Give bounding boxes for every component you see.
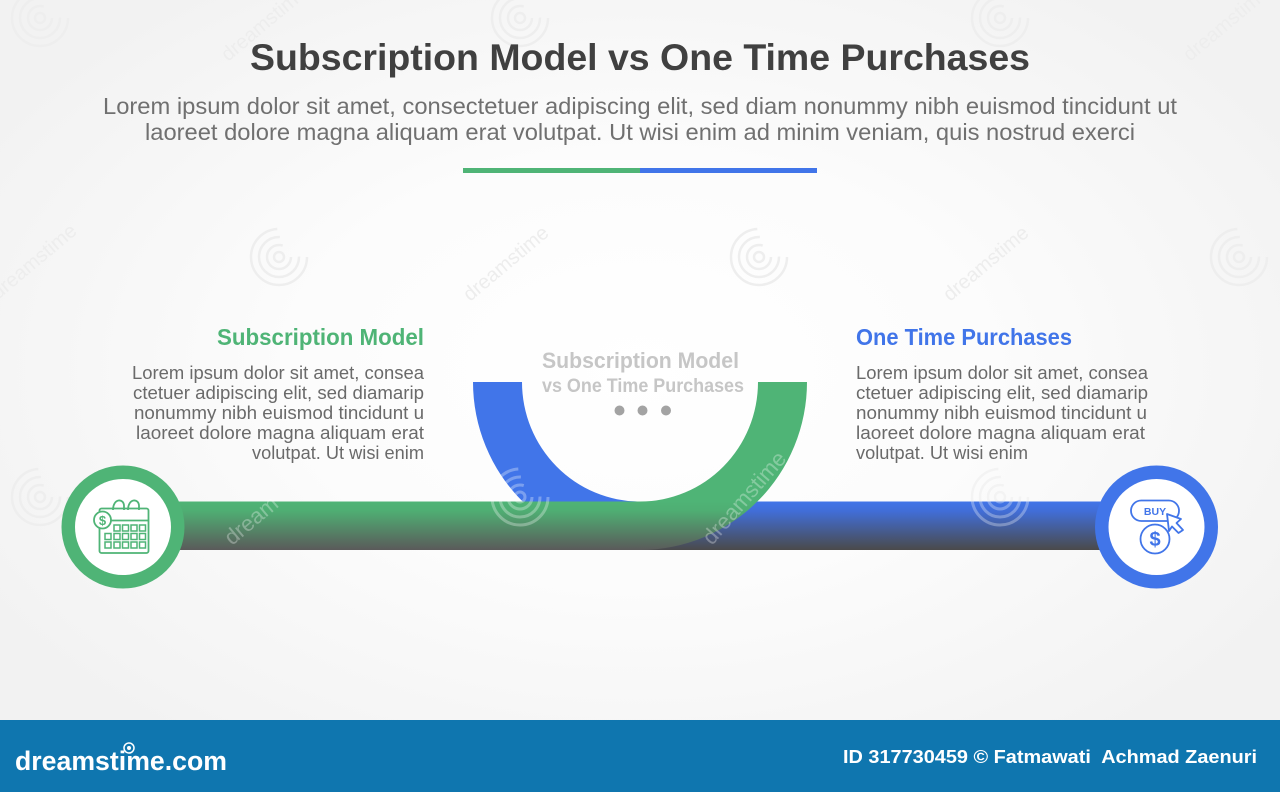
icon badge: calendar subscription — [62, 466, 184, 588]
icon: buy button, cursor and coin: $ — [1149, 529, 1161, 551]
body text left: laoreet dolore magna aliquam erat — [136, 423, 424, 443]
infographic canvas: dreamstime — [697, 446, 791, 549]
subtitle text: laoreet dolore magna aliquam erat volutpat. Ut wisi enim ad minim veniam, quis nostrud exerci — [145, 119, 1135, 145]
body text left: ctetuer adipiscing elit, sed diamarip — [133, 383, 424, 403]
infographic canvas: dream — [219, 491, 283, 550]
body text right: laoreet dolore magna aliquam erat — [856, 423, 1145, 443]
blue track: half arc and bar — [473, 382, 1110, 550]
body text left — [132, 363, 425, 463]
panel: subscription model text — [132, 324, 425, 463]
body text right: nonummy nibh euismod tincidunt u — [856, 403, 1147, 423]
subtitle text — [103, 93, 1178, 145]
center label: vs One Time Purchases — [542, 376, 744, 397]
icon badge: buy button — [1095, 466, 1218, 588]
body text right: volutpat. Ut wisi enim — [856, 443, 1028, 463]
icon: calendar with dollar coin — [94, 500, 148, 553]
subtitle text: Lorem ipsum dolor sit amet, consectetuer adipiscing elit, sed diam nonummy nibh euismod tincidunt ut — [103, 93, 1178, 119]
icon: buy button, cursor and coin: BUY — [1144, 506, 1166, 518]
body text right — [856, 363, 1149, 463]
heading: one time purchases: One Time Purchases — [856, 324, 1072, 350]
body text left: volutpat. Ut wisi enim — [252, 443, 424, 463]
center label: Subscription Model — [542, 348, 739, 373]
icon badge: calendar subscription: $ — [99, 513, 107, 528]
body text right: ctetuer adipiscing elit, sed diamarip — [856, 383, 1148, 403]
body text right: Lorem ipsum dolor sit amet, consea — [856, 363, 1149, 383]
footer credit: ID 317730459 © Fatmawati Achmad Zaenuri — [843, 747, 1257, 767]
panel: one time purchases text — [856, 324, 1149, 463]
body text left: nonummy nibh euismod tincidunt u — [134, 403, 424, 423]
infographic canvas: dreamstime — [939, 222, 1033, 306]
heading: subscription model: Subscription Model — [217, 324, 424, 350]
body text left: Lorem ipsum dolor sit amet, consea — [132, 363, 425, 383]
center label — [542, 348, 744, 416]
title divider — [463, 168, 817, 173]
green track: bar and half arc — [170, 382, 807, 550]
three dots — [614, 406, 671, 416]
icon: buy button, cursor and coin — [1131, 500, 1183, 554]
title: Subscription Model vs One Time Purchases — [250, 37, 1030, 78]
footer bar — [0, 720, 1280, 792]
footer logo: dreamstime.com — [15, 746, 227, 776]
infographic canvas: dreamstime — [459, 222, 553, 306]
